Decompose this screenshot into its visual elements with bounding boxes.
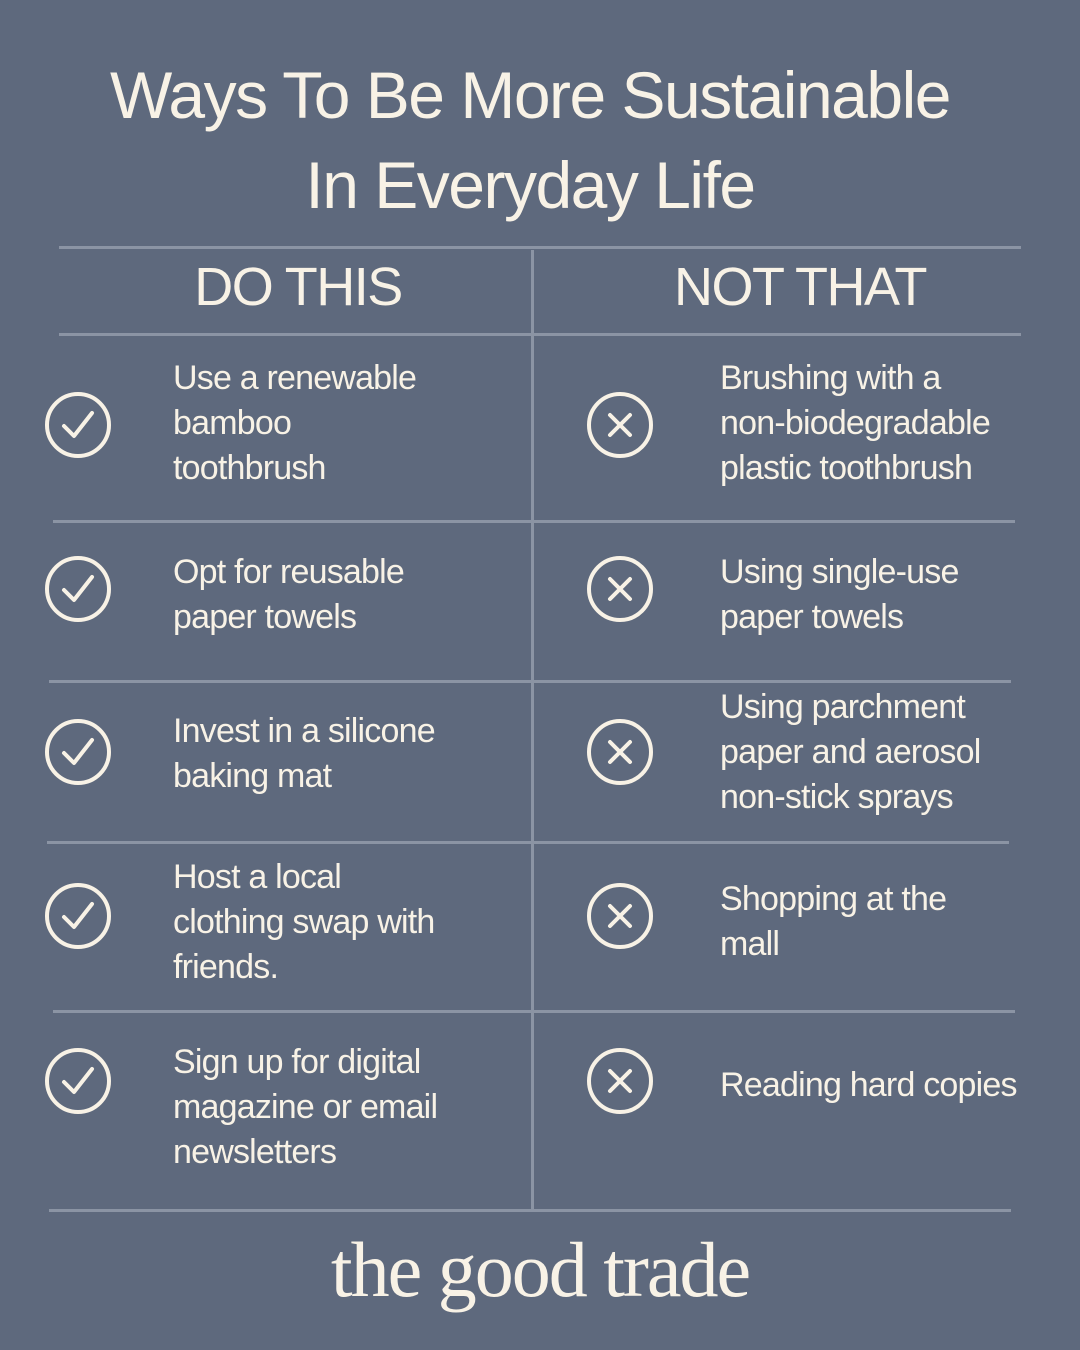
icon: x 1	[587, 392, 653, 458]
text: not 2: Using single-use	[720, 553, 959, 591]
text: do 1: bamboo	[173, 404, 291, 442]
icon: check 5	[45, 1048, 111, 1114]
text: not 3: paper and aerosol	[720, 733, 980, 771]
icon: check 4	[45, 883, 111, 949]
text: not 2: paper towels	[720, 598, 903, 636]
text: do 2: Opt for reusable	[173, 553, 404, 591]
header: do this: DO THIS	[194, 257, 402, 317]
text: do 2: paper towels	[173, 598, 356, 636]
text: do 5: newsletters	[173, 1133, 336, 1171]
text: not 3	[720, 688, 980, 816]
text: do 4: clothing swap with	[173, 903, 435, 941]
icon: x 4	[587, 883, 653, 949]
icon: check 1	[45, 392, 111, 458]
text: not 4	[720, 880, 946, 963]
icon: check 2	[45, 556, 111, 622]
text: do 3: Invest in a silicone	[173, 712, 435, 750]
text: do 1: Use a renewable	[173, 359, 416, 397]
text: not 3: Using parchment	[720, 688, 965, 726]
text: do 5: Sign up for digital	[173, 1043, 421, 1081]
text: do 1	[173, 359, 416, 487]
text: not 1: plastic toothbrush	[720, 449, 972, 487]
text: not 1: non-biodegradable	[720, 404, 990, 442]
header: not that: NOT THAT	[674, 257, 926, 317]
text: do 4	[173, 858, 435, 986]
title: Ways To Be More Sustainable	[110, 58, 950, 132]
icon: x 5	[587, 1048, 653, 1114]
text: not 2	[720, 553, 959, 636]
text: not 3: non-stick sprays	[720, 778, 953, 816]
text: do 5	[173, 1043, 437, 1171]
text: do 1: toothbrush	[173, 449, 326, 487]
icon: x 3	[587, 719, 653, 785]
icon: check 3	[45, 719, 111, 785]
text: not 1	[720, 359, 990, 487]
text: do 5: magazine or email	[173, 1088, 437, 1126]
text: do 4: friends.	[173, 948, 278, 986]
text: not 5: Reading hard copies	[720, 1066, 1017, 1104]
text: not 4: Shopping at the	[720, 880, 946, 918]
title	[110, 58, 950, 222]
title: In Everyday Life	[305, 148, 755, 222]
text: not 4: mall	[720, 925, 779, 963]
footer logo: the good trade	[331, 1226, 749, 1313]
icon: x 2	[587, 556, 653, 622]
text: not 1: Brushing with a	[720, 359, 940, 397]
text: do 2	[173, 553, 404, 636]
text: do 4: Host a local	[173, 858, 341, 896]
text: do 3	[173, 712, 435, 795]
text: do 3: baking mat	[173, 757, 331, 795]
